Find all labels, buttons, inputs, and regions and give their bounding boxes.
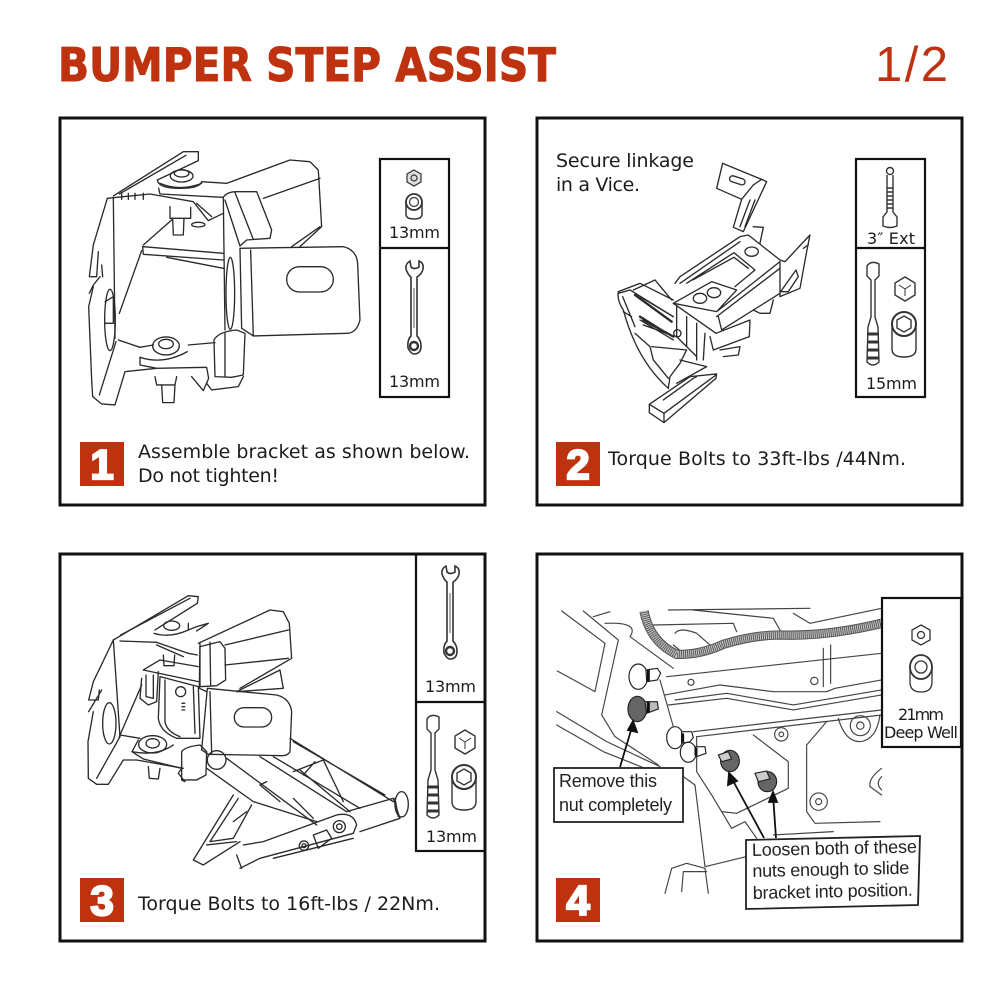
step number badge — [556, 441, 600, 488]
tool box: deep well socket — [882, 598, 961, 747]
label: 21mm deep well — [884, 705, 958, 742]
step text: Torque Bolts to 16ft-lbs / 22Nm. — [137, 893, 440, 915]
icon: 13mm socket — [406, 170, 422, 219]
callout: remove nut: nut completely — [559, 795, 672, 815]
step number badge: 2 — [566, 441, 590, 488]
step text: Assemble bracket as shown below. — [138, 441, 470, 463]
step number badge: 3 — [90, 877, 114, 924]
callout: remove nut — [554, 768, 683, 822]
panel: step 1 — [60, 118, 485, 505]
label: 15mm: 15mm — [866, 374, 917, 393]
illustration: assembled bracket — [89, 152, 360, 405]
note text — [556, 150, 694, 196]
tool box: extension and ratchet — [856, 159, 925, 397]
callout: loosen nuts: Loosen both of these — [752, 837, 917, 860]
illustration: vehicle frame — [557, 608, 882, 893]
panel: step 3 — [60, 554, 485, 941]
icon: 3 inch extension — [883, 168, 897, 228]
label: 3 inch ext: 3″ Ext — [867, 229, 915, 248]
page number: 1/2 — [875, 38, 948, 92]
step number badge: 1 — [90, 441, 114, 488]
label: 13mm: 13mm — [389, 372, 440, 391]
illustration: bracket with linkage — [88, 596, 408, 868]
icon: 21mm socket — [910, 625, 932, 692]
step number badge: 4 — [566, 877, 590, 924]
callout: loosen nuts: bracket into position. — [753, 880, 913, 903]
panel: step 4 — [537, 554, 962, 941]
note text: in a Vice. — [556, 174, 640, 196]
icon: ratchet, bolt head and 13mm socket — [427, 715, 476, 818]
icon: 13mm wrench — [406, 261, 423, 354]
icon: 13mm wrench — [442, 566, 459, 659]
panel: step 2 — [537, 118, 962, 505]
callout: remove nut: Remove this — [559, 771, 657, 791]
callout: loosen nuts: nuts enough to slide — [752, 858, 910, 881]
label: 13mm: 13mm — [426, 827, 477, 846]
step text: Torque Bolts to 33ft-lbs /44Nm. — [607, 448, 906, 470]
wire harness — [644, 611, 882, 654]
illustration: linkage in vice — [618, 163, 810, 423]
label: 21mm deep well: Deep Well — [884, 723, 958, 742]
step text: Do not tighten! — [138, 465, 279, 487]
note text: Secure linkage — [556, 150, 694, 172]
label: 13mm: 13mm — [425, 677, 476, 696]
icon: studs and nuts — [628, 664, 777, 792]
arrows to nuts — [620, 721, 777, 838]
callout: loosen nuts — [746, 836, 920, 909]
tool box: socket and wrench — [380, 159, 449, 397]
tool box: wrench and ratchet — [416, 554, 485, 851]
label: 21mm deep well: 21mm — [898, 705, 944, 724]
icon: ratchet, bolt head and 15mm socket — [867, 262, 916, 365]
step number badge — [556, 877, 600, 924]
step number badge — [80, 441, 124, 488]
step number badge — [80, 877, 124, 924]
step text — [138, 441, 470, 487]
title: BUMPER STEP ASSIST — [58, 38, 557, 92]
label: 13mm: 13mm — [389, 223, 440, 242]
